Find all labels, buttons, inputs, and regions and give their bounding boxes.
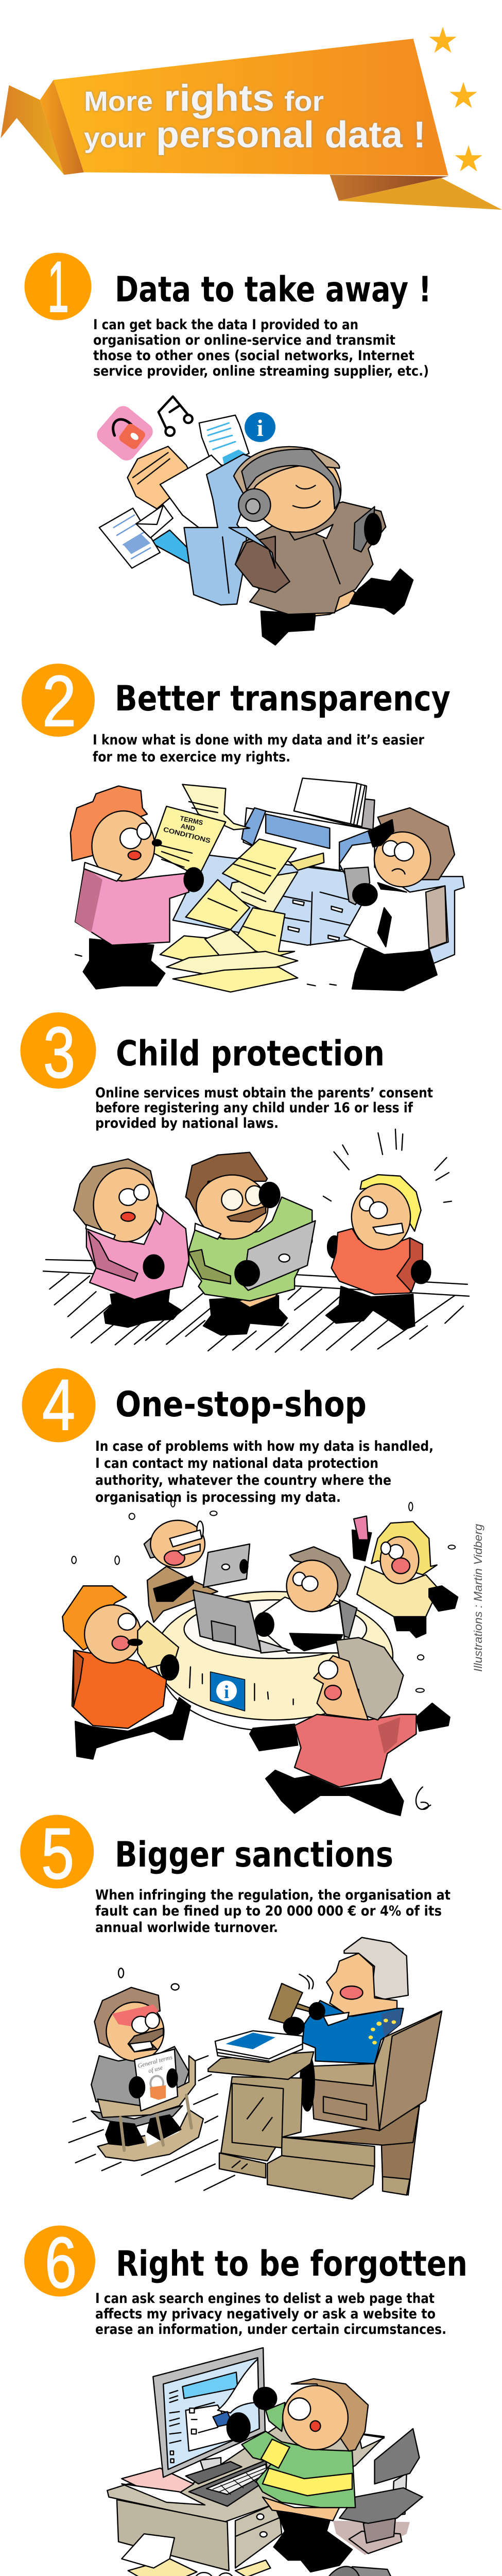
section 2 text: for me to exercice my rights. [93, 749, 290, 765]
title line two: personal data ! [156, 114, 426, 156]
sweat drops [72, 1500, 455, 1692]
document: general terms of use: General terms [137, 2053, 173, 2070]
section 4 number badge: 4 [42, 1364, 75, 1445]
tipped waste bin [315, 2563, 397, 2576]
section 4 text: I can contact my national data protection [95, 1455, 378, 1471]
section 5 heading: Bigger sanctions [115, 1835, 393, 1875]
brown coat [235, 502, 386, 614]
title line one: for [284, 86, 324, 117]
section 2 text: I know what is done with my data and it’s easier [93, 732, 425, 748]
illustration: frantic people at an information desk [62, 1500, 458, 1816]
signature [416, 1787, 430, 1809]
printed title: terms and conditions: AND [180, 822, 196, 833]
section 5 number badge: 5 [41, 1813, 74, 1894]
illustration: person with headphones carrying a bag of data: i [257, 415, 264, 441]
floor boards [69, 2056, 235, 2190]
document with blue lines [199, 415, 249, 466]
section 5 text: When infringing the regulation, the organisation at [95, 1887, 451, 1903]
office chair [333, 2429, 423, 2555]
info sign [210, 1672, 245, 1711]
orange woman with tablet [62, 1586, 191, 1759]
section 1 text: I can get back the data I provided to an [93, 317, 358, 333]
section 2 heading: Better transparency [115, 679, 451, 719]
title line one: rights [164, 78, 274, 119]
icon: three stars [429, 27, 482, 172]
judge bench [208, 2052, 314, 2178]
section 4 number badge [22, 1364, 96, 1445]
illustration: person erasing a web page at a desk [107, 2348, 423, 2576]
paper and envelope [150, 530, 194, 564]
section 4 heading: One-stop-shop [115, 1384, 367, 1425]
title line one: More [84, 86, 153, 117]
section 6 text [95, 2291, 446, 2337]
blonde woman with phone [352, 1516, 458, 1638]
person in striped sweater [227, 2379, 368, 2572]
receptionist [254, 1547, 357, 1653]
man in white coat [352, 948, 437, 990]
blue desk [173, 855, 464, 964]
section 3 number badge [21, 1012, 96, 1093]
title line two: your [84, 123, 146, 154]
section 6 text: I can ask search engines to delist a web page that [95, 2291, 435, 2307]
section 3 heading: Child protection [116, 1033, 385, 1074]
desk [107, 2424, 384, 2571]
printer [295, 792, 375, 829]
icon: padlock tile [93, 402, 157, 464]
illustration: person with headphones carrying a bag of data [93, 396, 413, 645]
section 4 text: organisation is processing my data. [95, 1489, 341, 1505]
printed title: terms and conditions [163, 815, 212, 844]
head [251, 448, 341, 532]
section 1 number badge [25, 246, 92, 327]
section 5 text: annual worlwide turnover. [95, 1920, 278, 1936]
section 6 number badge: 6 [45, 2222, 77, 2303]
man in green sweater [186, 1153, 315, 1335]
section 2 number badge [22, 660, 95, 741]
title banner [1, 39, 502, 210]
printed title: terms and conditions: CONDITIONS [163, 825, 212, 844]
illustration: judge with gavel and a sweating man [69, 1938, 442, 2199]
origami ribbon [1, 39, 502, 210]
info sign: i [224, 1682, 229, 1702]
section 1 text: service provider, online streaming supplier, etc.) [93, 363, 429, 379]
section 1 heading: Data to take away ! [115, 269, 431, 310]
blue bag [184, 454, 256, 605]
striped floor [43, 1260, 469, 1352]
legs [349, 569, 413, 614]
section 3 text: Online services must obtain the parents’ consent [95, 1085, 433, 1101]
illustration: parents and an angry child with a laptop [43, 1129, 469, 1352]
document: general terms of use: of use [147, 2064, 164, 2075]
section 3 text: provided by national laws. [95, 1115, 279, 1131]
illustrator credit: Illustrations : Martin Vidberg [472, 1523, 484, 1672]
eraser [213, 2412, 232, 2427]
info sign letter [245, 412, 275, 442]
section 1 text [93, 317, 429, 379]
section 5 text: fault can be fined up to 20 000 000 € or 4% of its [95, 1903, 442, 1919]
keyboard [189, 2460, 269, 2506]
document: terms and conditions [150, 806, 226, 876]
old man with tablet [144, 1520, 250, 1622]
circular information desk [154, 1591, 393, 1731]
section 6 text: erase an information, under certain circumstances. [95, 2321, 446, 2337]
section 3 number badge: 3 [43, 1012, 75, 1093]
stack of yellow pages [182, 785, 250, 829]
illustration: two people and a printer producing terms and conditions [71, 778, 464, 992]
section 5 text [95, 1887, 451, 1936]
floor papers [122, 2534, 326, 2576]
throne and steps [267, 2011, 442, 2199]
section 1 text: those to other ones (social networks, Internet [93, 348, 414, 364]
man in red shirt, front [250, 1638, 450, 1816]
woman in pink [83, 939, 165, 989]
section 5 number badge [20, 1813, 94, 1894]
monitor [153, 2348, 265, 2484]
section 4 text: In case of problems with how my data is handled, [95, 1438, 434, 1454]
section 2 number badge: 2 [42, 660, 76, 741]
section 3 text [95, 1085, 433, 1131]
pink papers [122, 2468, 194, 2501]
section 1 text: organisation or online-service and transmit [93, 332, 395, 348]
woman in pink [74, 1159, 189, 1327]
monitor [193, 1590, 261, 1652]
section 6 text: affects my privacy negatively or ask a website to [95, 2306, 436, 2322]
judge [269, 1938, 408, 2111]
stack of EU documents [215, 2031, 303, 2062]
printed title: terms and conditions: TERMS [179, 815, 204, 827]
section 1 number badge: 1 [47, 246, 69, 327]
folder [127, 446, 192, 509]
small stool and man [91, 1968, 203, 2161]
angry child in orange [323, 1129, 452, 1330]
section 4 text [95, 1438, 434, 1505]
section 6 number badge [24, 2222, 95, 2303]
tablet and glove [354, 506, 375, 552]
section 4 text: authority, whatever the country where the [95, 1472, 391, 1488]
section 2 text [93, 732, 425, 765]
section 3 text: before registering any child under 16 or less if [95, 1100, 413, 1116]
icon: music note [159, 396, 189, 428]
